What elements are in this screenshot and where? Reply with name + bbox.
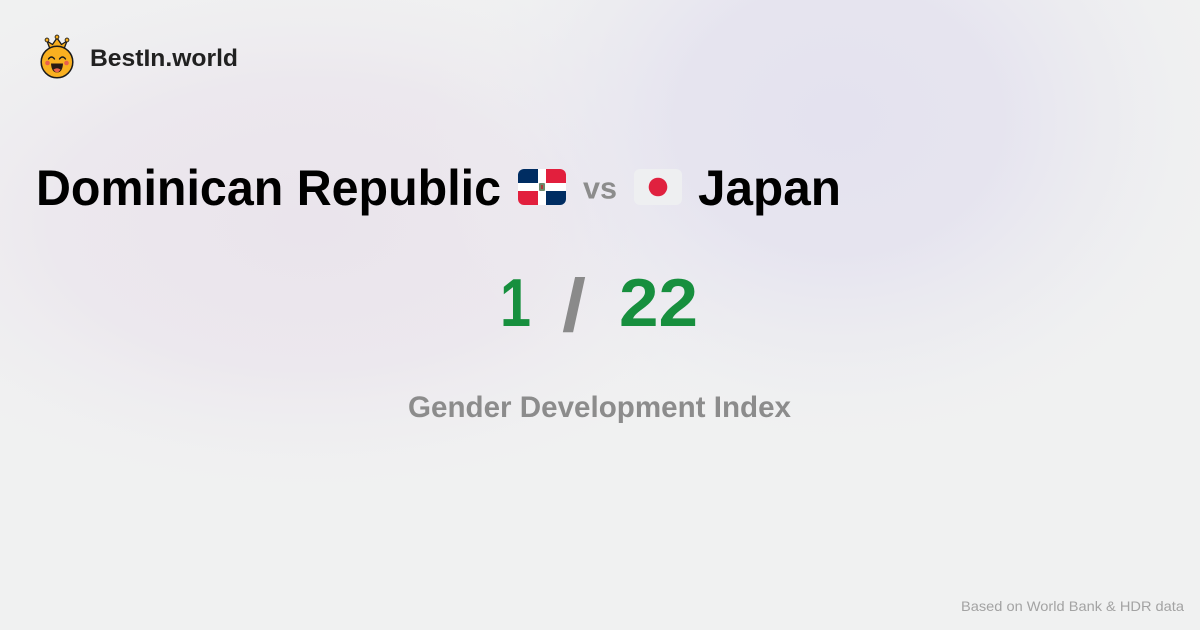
metric label: Gender Development Index	[408, 391, 791, 424]
icon: crown smiley	[41, 35, 73, 78]
logo	[41, 35, 238, 78]
score values	[500, 264, 698, 347]
value: Dominican Republic: 1	[500, 265, 531, 341]
icon: Dominican Republic flag	[518, 169, 566, 205]
country name: Dominican Republic: Dominican Republic	[36, 160, 501, 216]
heading: comparison title	[39, 168, 838, 216]
source note: Based on World Bank & HDR data	[961, 598, 1184, 614]
icon: Japan flag	[634, 169, 682, 205]
value: Japan: 22	[619, 265, 698, 341]
separator: /	[562, 264, 586, 347]
country name: Japan: Japan	[698, 160, 841, 216]
vs label: vs	[583, 170, 617, 206]
brand name: BestIn.world	[90, 45, 238, 72]
